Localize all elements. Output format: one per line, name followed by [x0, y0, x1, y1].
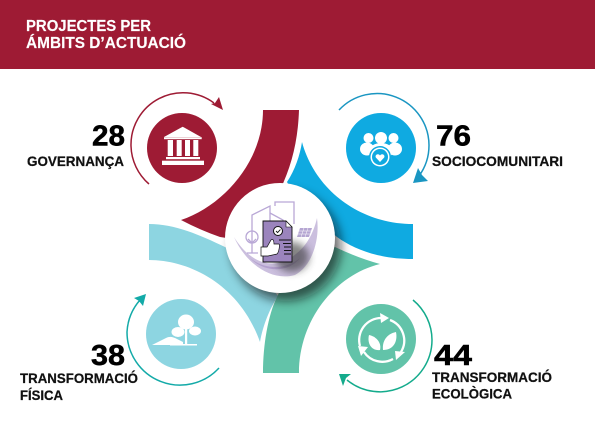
label: transformació física: TRANSFORMACIÓ [20, 371, 138, 386]
label: transformació física: FÍSICA [20, 388, 63, 403]
icon: recycling leaves [346, 304, 416, 374]
label: transformació ecològica: TRANSFORMACIÓ [432, 370, 552, 385]
label: transformació física [20, 371, 138, 403]
shape: light blue petal [149, 224, 278, 342]
arrow: blue [339, 93, 429, 183]
icon: people with heart [346, 113, 416, 183]
panel: governança [27, 93, 223, 184]
icon: classical building [147, 113, 217, 183]
shape: blue petal [287, 142, 413, 259]
title [26, 18, 186, 52]
central icon: city, crescent and approved document [234, 202, 318, 276]
value: 76: 76 [436, 120, 471, 152]
panel: sociocomunitari [339, 93, 563, 183]
value: 28: 28 [92, 120, 125, 152]
panel: transformació ecològica [339, 300, 552, 402]
title: ÁMBITS D’ACTUACIÓ [26, 34, 186, 52]
value: 38: 38 [91, 340, 125, 372]
label: governança: GOVERNANÇA [27, 154, 124, 169]
icon: tree and hill [146, 299, 216, 369]
arrow: red [131, 93, 223, 184]
arrow: green [339, 300, 432, 392]
label: transformació ecològica: ECOLÒGICA [432, 386, 512, 402]
shape: green petal [263, 247, 380, 373]
value: 44: 44 [434, 340, 472, 372]
label: transformació ecològica [432, 370, 552, 402]
label: sociocomunitari: SOCIOCOMUNITARI [432, 154, 563, 169]
title: PROJECTES PER [26, 18, 151, 35]
arrow: teal [127, 294, 219, 385]
central circle [225, 183, 341, 301]
solar panel [297, 228, 312, 237]
panel: transformació física [20, 294, 219, 403]
shape: red petal [181, 110, 299, 240]
header band [0, 0, 595, 69]
